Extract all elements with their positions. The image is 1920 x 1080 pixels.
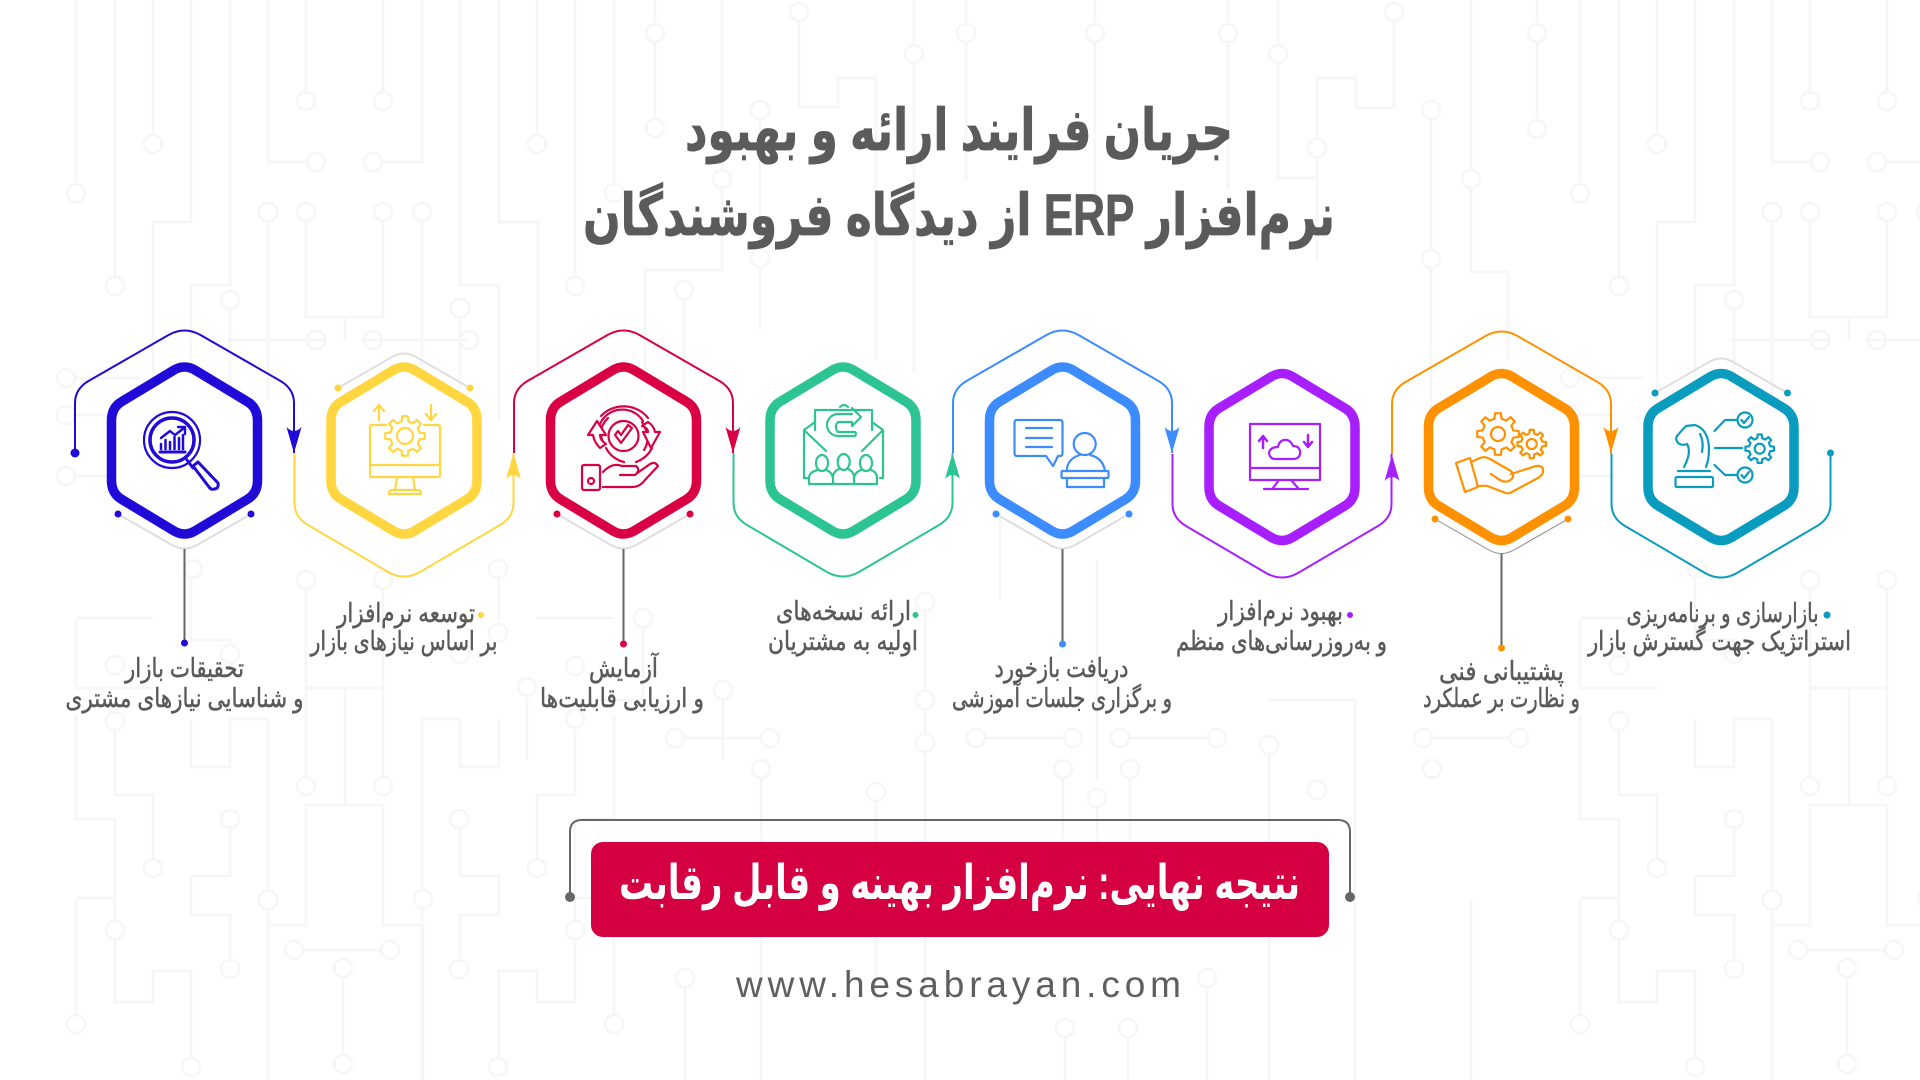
label <box>66 653 304 714</box>
icon: gears and hand <box>1456 413 1546 493</box>
start dot <box>70 448 80 458</box>
hexagon <box>770 367 916 534</box>
bracket above result box <box>565 820 1355 902</box>
title: نرم‌افزار ERP از دیدگاه فروشندگان <box>583 182 1335 250</box>
label: و به‌روزرسانی‌های منظم <box>1176 626 1387 657</box>
label <box>768 596 918 657</box>
dots <box>114 510 254 646</box>
arrowhead <box>726 427 740 453</box>
icon: monitor with gear <box>370 405 440 494</box>
flow line <box>514 330 733 453</box>
label: ارائه نسخه‌های <box>776 596 911 626</box>
result banner: نتیجه نهایی: نرم‌افزار بهینه و قابل رقابت <box>619 857 1300 911</box>
label: و برگزاری جلسات آموزشی <box>952 682 1172 714</box>
label: بهبود نرم‌افزار <box>1216 596 1343 627</box>
lower arc and leader <box>1435 519 1568 554</box>
arrowhead <box>1604 427 1618 453</box>
label: تحقیقات بازار <box>123 653 244 683</box>
title: جریان فرایند ارائه و بهبود <box>685 98 1233 165</box>
arrowhead <box>1164 427 1180 453</box>
upper arc <box>338 354 470 388</box>
flow line <box>1612 454 1830 578</box>
step 2: software development <box>294 354 521 657</box>
icon: speech bubble and speaker <box>1014 420 1108 487</box>
hexagon <box>990 367 1136 534</box>
dots <box>1432 516 1572 652</box>
label: و ارزیابی قابلیت‌ها <box>540 683 704 714</box>
label: و نظارت بر عملکرد <box>1423 683 1580 714</box>
label: بر اساس نیازهای بازار <box>309 626 498 657</box>
lower arc and leader <box>557 514 690 548</box>
flow line <box>294 453 514 576</box>
label: اولیه به مشتریان <box>768 626 918 657</box>
flow line <box>1392 332 1611 454</box>
hexagon <box>1209 374 1355 540</box>
title <box>583 98 1335 250</box>
icon: magnifier with chart <box>144 412 218 489</box>
step 5: feedback and training <box>952 330 1180 714</box>
flow line <box>75 330 294 453</box>
label <box>309 598 498 657</box>
hexagon <box>1648 374 1794 540</box>
label: استراتژیک جهت گسترش بازار <box>1586 626 1851 657</box>
result banner <box>591 842 1329 937</box>
label: پشتیبانی فنی <box>1439 656 1564 686</box>
lower arc and leader <box>996 514 1129 548</box>
hexagon <box>112 367 258 534</box>
hexagon <box>550 367 696 534</box>
dots <box>992 510 1132 648</box>
label <box>1176 596 1387 657</box>
dots <box>554 510 694 648</box>
icon: chess knight and strategy <box>1676 412 1774 487</box>
arrowhead <box>1384 455 1400 481</box>
upper arc <box>1655 358 1788 393</box>
label: دریافت بازخورد <box>994 653 1128 684</box>
icon: monitor with cloud <box>1250 424 1320 489</box>
flow line <box>734 453 952 576</box>
website url: www.hesabrayan.com <box>735 964 1181 1005</box>
end dot <box>1827 450 1834 456</box>
hexagon <box>331 367 477 534</box>
label <box>1423 656 1580 714</box>
label: توسعه نرم‌افزار <box>335 598 475 629</box>
hexagon <box>1428 374 1574 540</box>
icon: cycle check and hand <box>582 406 660 490</box>
icon: envelope with people <box>804 405 883 484</box>
label <box>540 652 704 714</box>
arrowhead <box>945 453 960 479</box>
dots <box>334 384 474 392</box>
step 6: software improvement <box>1172 374 1400 657</box>
label <box>952 653 1172 714</box>
step 8: marketing and strategic planning <box>1586 358 1851 657</box>
step 1: market research <box>66 330 304 714</box>
flow line <box>953 330 1172 453</box>
arrowhead <box>286 427 302 453</box>
step 3: testing <box>514 330 740 714</box>
dots <box>1652 390 1791 396</box>
arrowhead <box>506 453 521 479</box>
lower arc and leader <box>118 514 251 548</box>
label: بازارسازی و برنامه‌ریزی <box>1626 598 1818 629</box>
flow line <box>1172 454 1392 578</box>
label: و شناسایی نیازهای مشتری <box>66 683 304 714</box>
step 4: initial releases <box>734 367 960 657</box>
label: آزمایش <box>589 652 659 683</box>
label <box>1586 598 1851 657</box>
step 7: technical support <box>1392 332 1618 714</box>
